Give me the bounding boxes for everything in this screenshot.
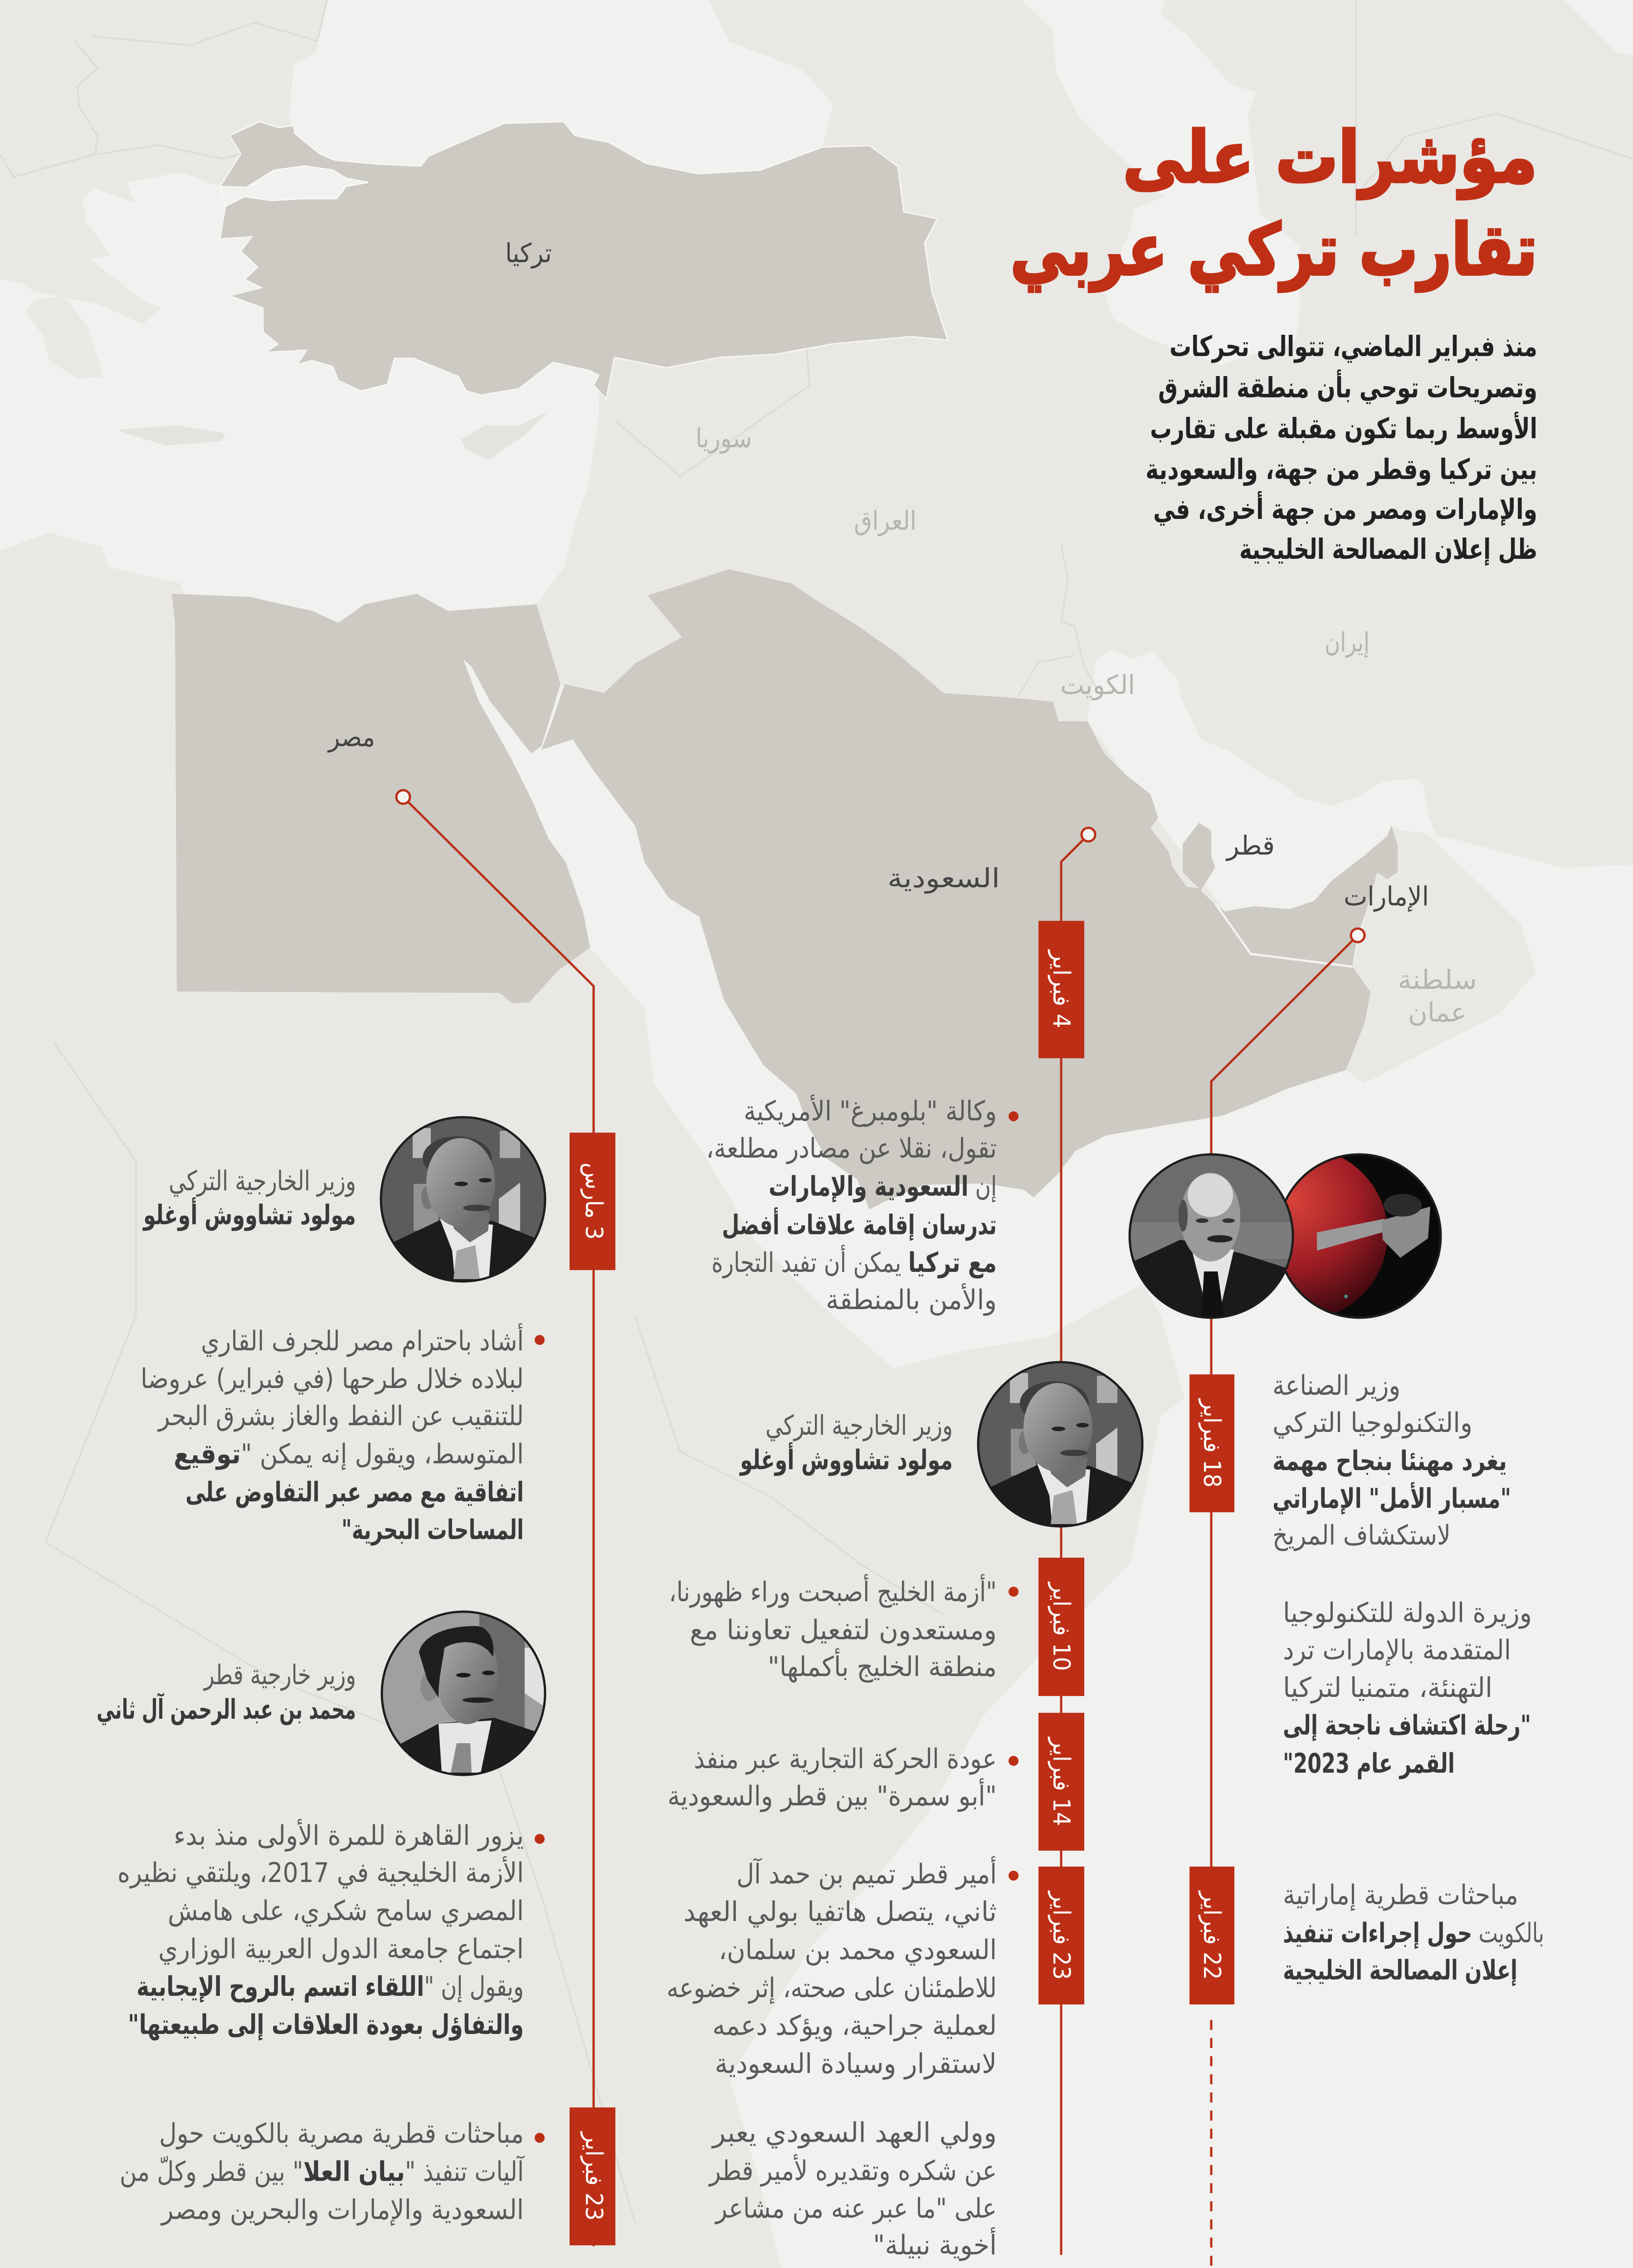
text: Crown Prince thanks: وولي العهد السعودي يعبر — [711, 2117, 997, 2149]
text: UAE minister replies — [1283, 1597, 1532, 1779]
text: Al Thani visits Cairo: والتفاؤل بعودة العلاقات إلى طبيعتها" — [128, 2009, 524, 2041]
text: UAE minister replies: وزيرة الدولة للتكنولوجيا — [1283, 1597, 1532, 1629]
name: Cavusoglu left: وزير الخارجية التركي — [169, 1165, 356, 1197]
text: 3 March Egypt praise: أشاد باحترام مصر للجرف القاري — [201, 1323, 524, 1357]
text: UAE minister replies: المتقدمة بالإمارات ترد — [1283, 1634, 1511, 1666]
date tag: 4 February: 4 فبراير — [1048, 949, 1075, 1028]
text: Crown Prince thanks — [708, 2117, 997, 2261]
text: Varank congratulates: وزير الصناعة — [1272, 1370, 1400, 1402]
text: 23 February Qatar Egypt talks: مباحثات قطرية مصرية بالكويت حول — [159, 2118, 524, 2150]
text: 23 February Qatar Egypt talks: آليات تنفيذ "بيان العلا" بين قطر وكلّ من — [120, 2155, 525, 2188]
border: Emirates — [1215, 904, 1352, 967]
text: 23 February Emir call: أمير قطر تميم بن حمد آل — [736, 1856, 997, 1890]
date tag: 22 February: 22 فبراير — [1198, 1890, 1225, 1980]
land: Peloponnese — [26, 296, 103, 379]
date tag: 23 February centre — [1038, 1867, 1084, 2004]
date tag: 23 February centre: 23 فبراير — [1048, 1890, 1075, 1980]
text: Bloomberg report — [706, 1095, 1019, 1316]
text: Varank congratulates: لاستكشاف المريخ — [1272, 1520, 1451, 1551]
text: 23 February Emir call: لعملية جراحية، ويؤكد دعمه — [712, 2010, 997, 2042]
map labels: سلطنة — [1398, 964, 1477, 995]
date tag: 3 March — [570, 1133, 615, 1270]
sea: Gulf of Suez — [463, 660, 531, 757]
land: Oman — [1346, 826, 1536, 1083]
text: 14 February trade — [668, 1743, 1019, 1812]
name: Al Thani — [97, 1659, 356, 1725]
text: 10 February quote: منطقة الخليج بأكملها" — [768, 1648, 997, 1683]
map labels: قطر — [1225, 830, 1275, 861]
text: 14 February trade: "أبو سمرة" بين قطر والسعودية — [668, 1778, 997, 1812]
text: Al Thani visits Cairo — [117, 1819, 545, 2041]
text: Al Thani visits Cairo: يزور القاهرة للمرة الأولى منذ بدء — [174, 1819, 524, 1852]
country: Turkey — [220, 122, 948, 399]
name: Al Thani: وزير خارجية قطر — [203, 1659, 356, 1691]
text: Al Thani visits Cairo: المصري سامح شكري، على هامش — [168, 1895, 524, 1927]
timeline: right — [1211, 929, 1365, 2268]
sea: Persian Gulf — [1087, 649, 1436, 911]
title: مؤشرات على — [1123, 116, 1537, 199]
title: تقارب تركي عربي — [1010, 209, 1537, 292]
date tag: 23 February left — [570, 2107, 615, 2245]
text: Crown Prince thanks: عن شكره وتقديره لأمير قطر — [708, 2154, 997, 2187]
text: Al Thani visits Cairo: اجتماع جامعة الدول العربية الوزاري — [158, 1933, 524, 1965]
photo: Mohammed bin Abdulrahman Al Thani — [382, 1612, 545, 1775]
text: Bloomberg report: والأمن بالمنطقة — [826, 1283, 997, 1316]
text: Bloomberg report: إن السعودية والإمارات — [769, 1171, 997, 1202]
text: 3 March Egypt praise: المساحات البحرية" — [341, 1514, 524, 1546]
text: 22 February Qatar UAE talks: مباحثات قطرية إماراتية — [1283, 1879, 1518, 1911]
text: 3 March Egypt praise: اتفاقية مع مصر عبر التفاوض على — [185, 1476, 524, 1508]
map labels: تركيا — [505, 238, 552, 269]
text: 10 February quote: "أزمة الخليج أصبحت وراء ظهورنا، — [669, 1574, 997, 1608]
text: Bloomberg report: تقول، نقلا عن مصادر مطلعة، — [706, 1133, 997, 1164]
text: 14 February trade: عودة الحركة التجارية عبر منفذ — [694, 1743, 997, 1775]
sea: Marmara — [220, 166, 368, 206]
text: 10 February quote: ومستعدون لتفعيل تعاوننا مع — [690, 1614, 997, 1646]
text: Al Thani visits Cairo: ويقول إن "اللقاء اتسم بالروح الإيجابية — [136, 1971, 524, 2003]
text: 23 February Emir call: ثاني، يتصل هاتفيا بولي العهد — [683, 1896, 997, 1928]
photo: Mars and probe — [1285, 1153, 1442, 1319]
intro text: منذ فبراير الماضي، تتوالى تحركات — [1170, 330, 1537, 363]
text: Crown Prince thanks: أخوية نبيلة" — [873, 2227, 997, 2261]
name: Al Thani: محمد بن عبد الرحمن آل ثاني — [97, 1692, 356, 1725]
text: 3 March Egypt praise: للتنقيب عن النفط والغاز بشرق البحر — [157, 1400, 524, 1432]
map labels: العراق — [854, 505, 916, 537]
sea: Caspian — [1022, 0, 1300, 365]
island: Crete — [118, 425, 225, 445]
name: Cavusoglu centre: مولود تشاووش أوغلو — [739, 1442, 953, 1476]
date tag: 3 March: 3 مارس — [580, 1163, 607, 1240]
map labels: إيران — [1325, 627, 1370, 658]
name: Cavusoglu left: مولود تشاووش أوغلو — [142, 1197, 356, 1231]
date tag: 23 February left: 23 فبراير — [580, 2131, 607, 2221]
map labels: الإمارات — [1344, 881, 1429, 912]
date tag: 14 February: 14 فبراير — [1048, 1736, 1075, 1826]
date tag: 18 February — [1189, 1374, 1234, 1512]
text: 23 February Emir call: لاستقرار وسيادة السعودية — [715, 2048, 997, 2080]
intro text: والإمارات ومصر من جهة أخرى، في — [1153, 491, 1537, 526]
intro text: بين تركيا وقطر من جهة، والسعودية — [1146, 453, 1537, 486]
text: Varank congratulates: "مسبار الأمل" الإماراتي — [1272, 1482, 1511, 1515]
map labels: سوريا — [696, 423, 752, 454]
text: 23 February Emir call: السعودي محمد بن سلمان، — [719, 1934, 997, 1966]
text: 23 February Emir call — [667, 1856, 1019, 2080]
text: 22 February Qatar UAE talks — [1283, 1879, 1544, 1986]
map labels: مصر — [327, 722, 375, 753]
timeline: left — [396, 790, 598, 2268]
text: UAE minister replies: التهنئة، متمنيا لتركيا — [1283, 1672, 1492, 1704]
text: 3 March Egypt praise: المتوسط، ويقول إنه يمكن "توقيع — [174, 1438, 524, 1470]
text: 3 March Egypt praise — [141, 1323, 545, 1546]
country: Egypt — [172, 594, 590, 1003]
text: 23 February Emir call: للاطمئنان على صحته، إثر خضوعه — [667, 1972, 997, 2004]
sea: top right corner — [1564, 0, 1633, 55]
intro text — [1146, 330, 1537, 566]
name: Cavusoglu left — [142, 1165, 356, 1231]
island: Cyprus — [461, 411, 549, 460]
text: UAE minister replies: "رحلة اكتشاف ناجحة إلى — [1283, 1710, 1531, 1741]
text: Bloomberg report: مع تركيا يمكن أن تفيد التجارة — [712, 1245, 997, 1279]
text: Bloomberg report: وكالة "بلومبرغ" الأمريكية — [744, 1095, 997, 1127]
date tag: 10 February: 10 فبراير — [1048, 1581, 1075, 1671]
date tag: 10 February — [1038, 1558, 1084, 1696]
text: Al Thani visits Cairo: الأزمة الخليجية في 2017، ويلتقي نظيره — [117, 1856, 524, 1889]
title — [1010, 116, 1537, 292]
text: Bloomberg report: تدرسان إقامة علاقات أفضل — [722, 1207, 997, 1241]
text: 3 March Egypt praise: لبلاده خلال طرحها (في فبراير) عروضا — [141, 1363, 524, 1395]
map labels — [327, 238, 1477, 1028]
date tag: 14 February — [1038, 1713, 1084, 1851]
text: 22 February Qatar UAE talks: إعلان المصالحة الخليجية — [1283, 1955, 1517, 1986]
sea: Black Sea — [289, 0, 833, 174]
sea: Aegean and Mediterranean — [0, 172, 599, 623]
country: Saudi Arabia with Gulf states and Yemen — [541, 569, 1398, 1209]
timeline: centre — [1054, 828, 1095, 2268]
photo: Mevlut Cavusoglu left — [381, 1117, 545, 1281]
text: Varank congratulates: يغرد مهنئا بنجاح مهمة — [1272, 1445, 1507, 1477]
text: UAE minister replies: القمر عام 2023" — [1283, 1748, 1455, 1779]
sea: Red Sea, Gulf of Aden and Indian Ocean — [463, 660, 1633, 2268]
photo: Mustafa Varank — [1130, 1154, 1293, 1318]
map labels: السعودية — [887, 863, 1000, 894]
date tag: 22 February — [1189, 1867, 1234, 2004]
intro text: ظل إعلان المصالحة الخليجية — [1239, 533, 1537, 566]
text: 23 February Qatar Egypt talks: السعودية والإمارات والبحرين ومصر — [160, 2194, 524, 2226]
text: 23 February Qatar Egypt talks — [120, 2118, 545, 2226]
map labels: الكويت — [1060, 670, 1135, 701]
intro text: وتصريحات توحي بأن منطقة الشرق — [1158, 369, 1537, 404]
text: Varank congratulates: والتكنولوجيا التركي — [1272, 1407, 1472, 1439]
date tag: 18 February: 18 فبراير — [1198, 1398, 1225, 1488]
date tag: 4 February — [1038, 921, 1084, 1058]
text: 22 February Qatar UAE talks: بالكويت حول إجراءات تنفيذ — [1283, 1917, 1544, 1949]
text: Varank congratulates — [1272, 1370, 1511, 1551]
name: Cavusoglu centre: وزير الخارجية التركي — [765, 1410, 953, 1442]
text: Crown Prince thanks: على "ما عبر عنه من مشاعر — [714, 2193, 997, 2224]
name: Cavusoglu centre — [739, 1410, 953, 1476]
map labels: عمان — [1408, 997, 1467, 1028]
text: 10 February quote — [669, 1574, 1019, 1683]
photo: Mevlut Cavusoglu centre — [978, 1362, 1142, 1526]
